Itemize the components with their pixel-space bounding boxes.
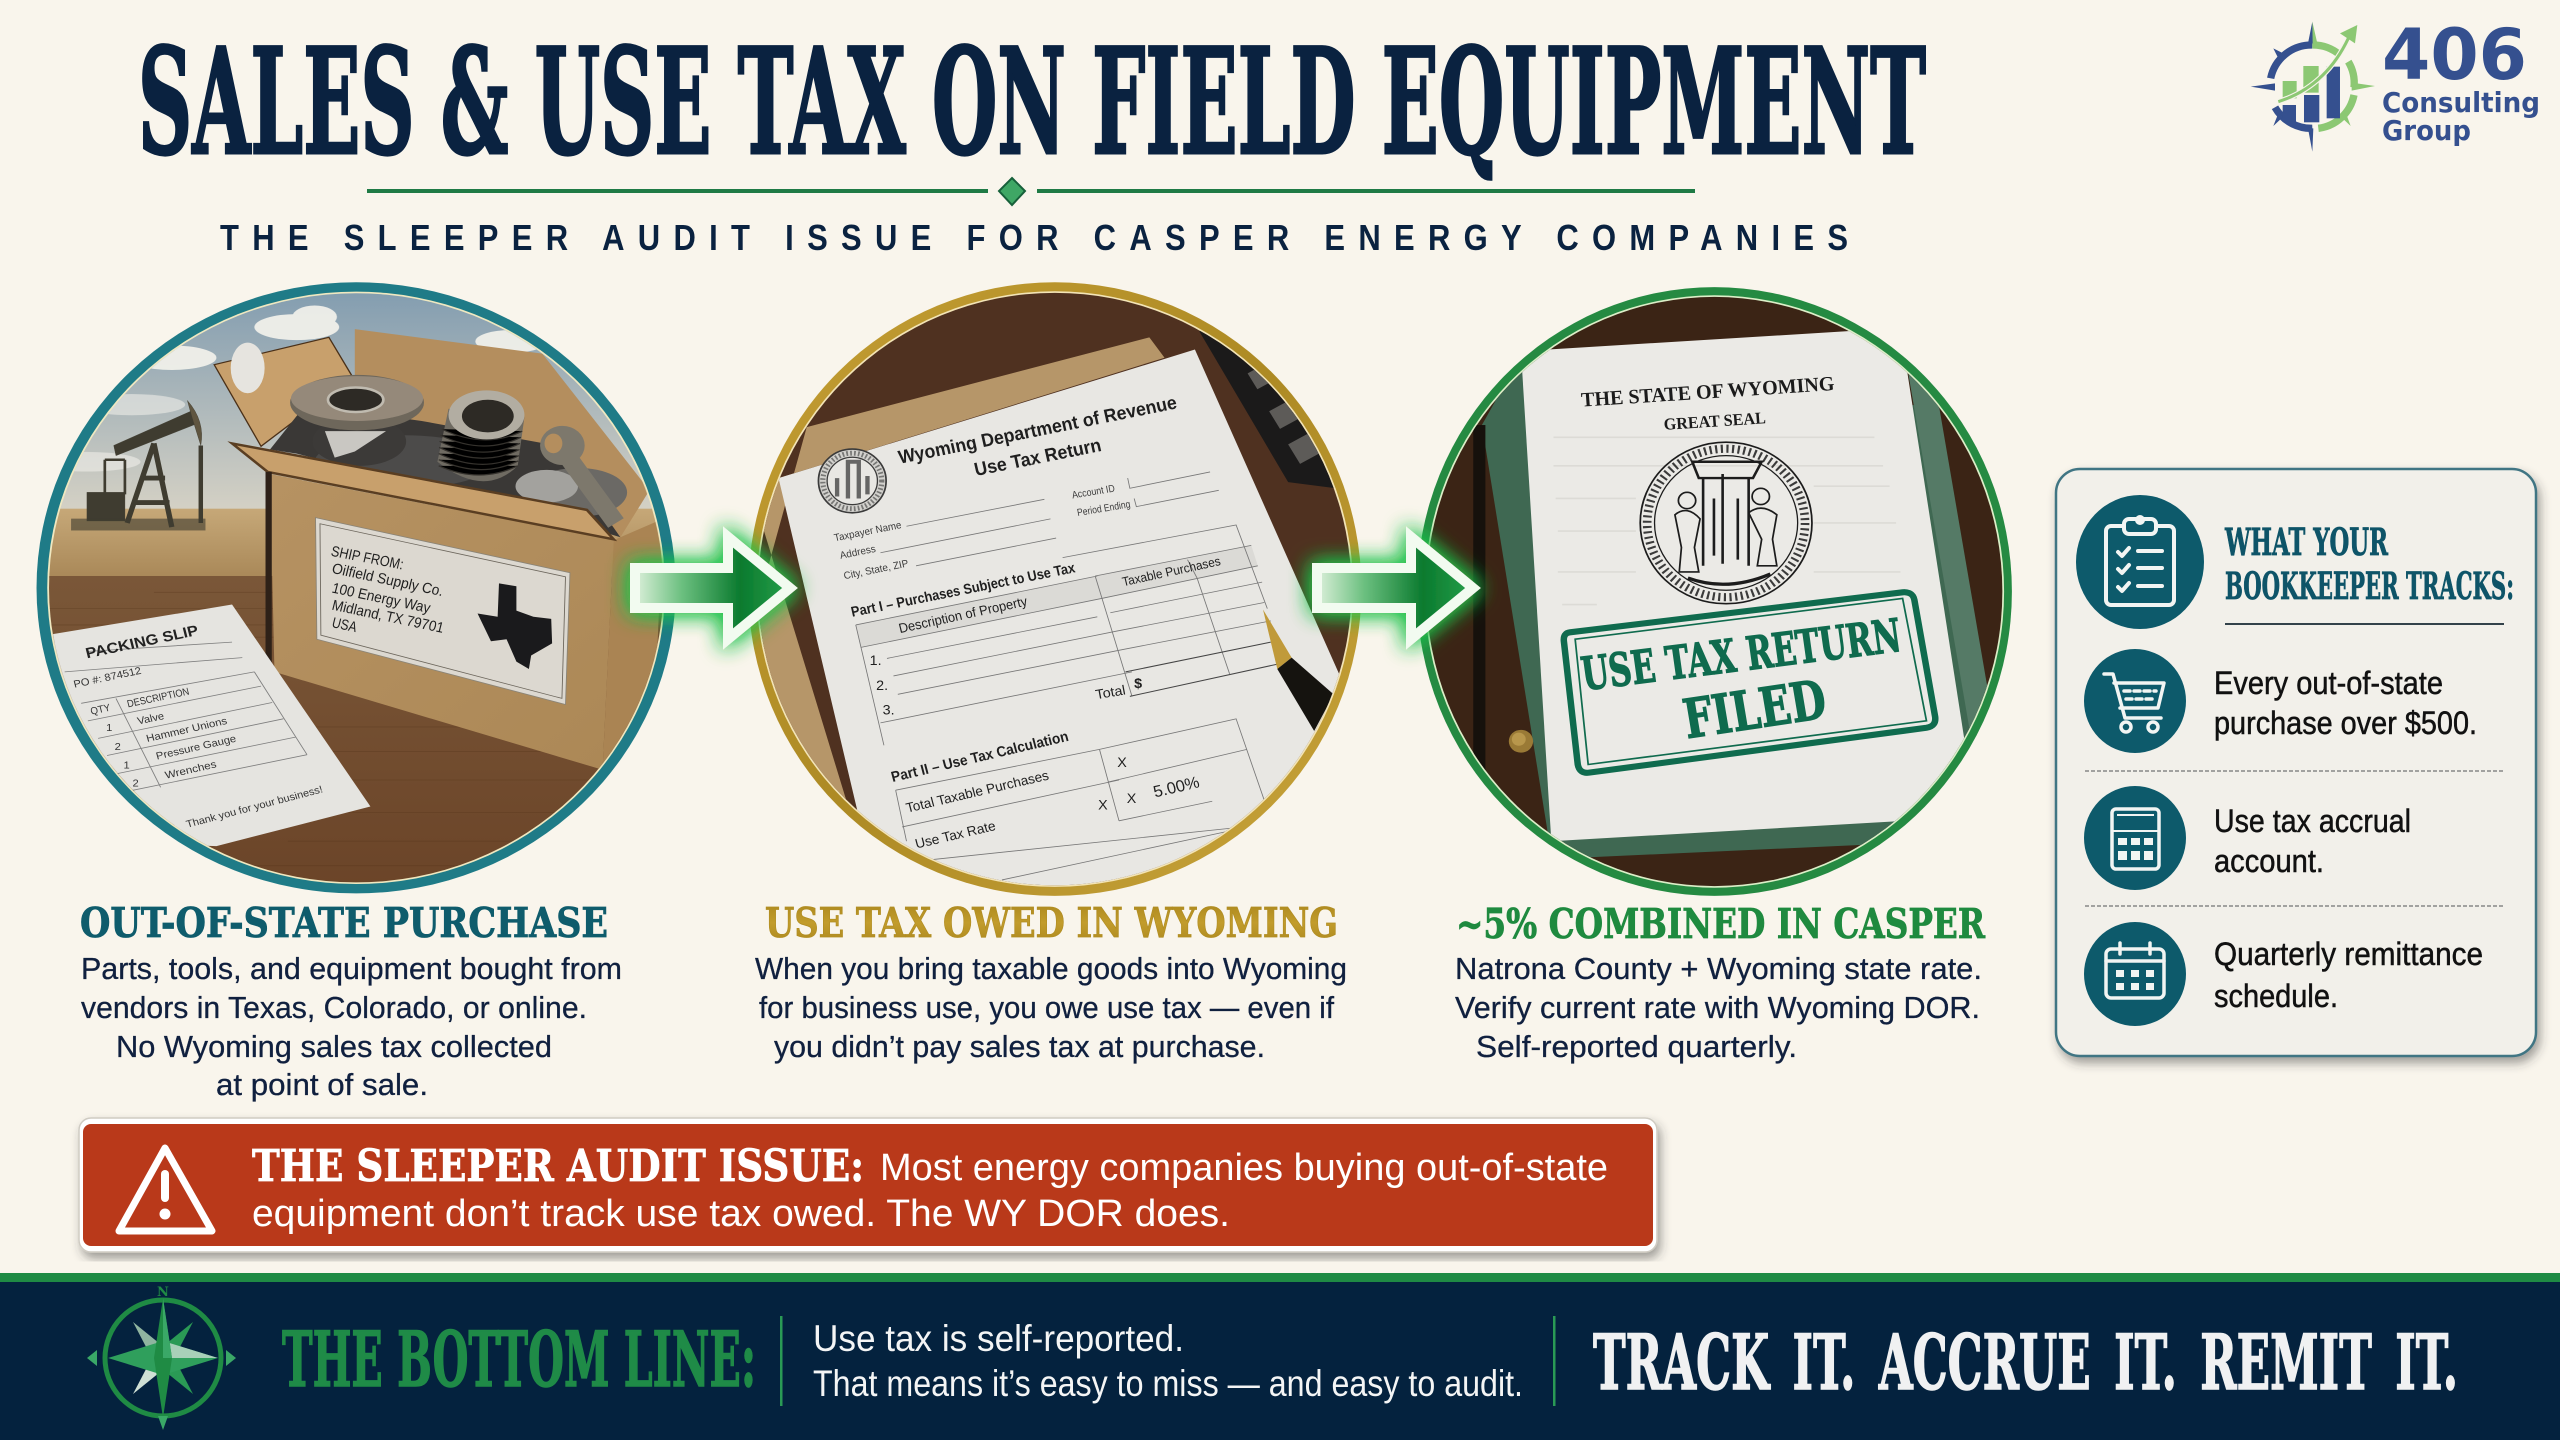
icon: compass rose	[87, 1285, 236, 1430]
heading: out-of-state purchase: OUT-OF-STATE PURCHASE	[80, 899, 608, 947]
use tax return form: 5.00%	[1151, 773, 1201, 801]
use tax return form: Taxpayer Name	[833, 519, 903, 544]
description text	[1455, 951, 1982, 1064]
bottom line text: Use tax is self-reported.	[813, 1318, 1184, 1359]
logo: 406 Consulting Group	[2251, 14, 2540, 152]
item: quarterly remittance schedule: Quarterly remittance	[2214, 936, 2483, 972]
packing slip: QTY	[89, 702, 112, 718]
shipping label: Midland, TX 79701	[330, 597, 446, 637]
callout: the sleeper audit issue	[79, 1118, 1657, 1252]
use tax return form: Taxable Purchases	[1121, 553, 1222, 589]
arrow: purchase to use tax owed	[635, 537, 790, 639]
logo wordmark: 406	[2382, 14, 2527, 96]
use tax return form: X	[1127, 790, 1136, 806]
pumpjack	[71, 401, 205, 530]
description text: Parts, tools, and equipment bought from	[81, 951, 622, 986]
shipping label: USA	[330, 615, 359, 636]
item: use tax accrual account	[2214, 803, 2411, 879]
description text	[755, 951, 1347, 1064]
form seal	[818, 449, 886, 513]
item: quarterly remittance schedule	[2214, 936, 2483, 1014]
packing slip: PACKING SLIP	[84, 623, 200, 662]
use tax return form: Description of Property	[897, 593, 1029, 636]
use tax return form: Wyoming Department of Revenue	[896, 392, 1179, 469]
heading: what your bookkeeper tracks	[2224, 520, 2514, 608]
heading: combined rate: ~5% COMBINED IN CASPER	[1456, 900, 1986, 948]
description text: Self-reported quarterly.	[1476, 1029, 1797, 1064]
use tax return form: Address	[839, 543, 877, 562]
icon: Texas silhouette	[478, 583, 552, 669]
panel: step 1 photo circle, out-of-state box	[36, 282, 675, 894]
logo wordmark	[2382, 14, 2540, 147]
use tax return form: Account ID	[1071, 483, 1116, 501]
packing slip: 2	[132, 778, 139, 789]
text block: combined rate in Casper	[1455, 900, 1986, 1064]
use tax return form: 1.	[870, 652, 882, 668]
description text: No Wyoming sales tax collected	[116, 1029, 552, 1064]
state document: THE STATE OF WYOMING	[1580, 372, 1835, 412]
use tax return form: $	[1134, 676, 1142, 691]
packing slip: 1	[124, 760, 130, 771]
logo wordmark: Group	[2382, 114, 2471, 147]
item: quarterly remittance schedule: schedule.	[2214, 978, 2338, 1014]
description text: at point of sale.	[216, 1067, 428, 1102]
brass rivet	[1509, 730, 1533, 753]
packing slip: Hammer Unions	[145, 715, 229, 745]
use tax return form	[779, 350, 1345, 910]
bottom line text	[813, 1318, 1523, 1404]
use tax return form: Part II – Use Tax Calculation	[889, 728, 1070, 786]
flange and fittings	[290, 375, 616, 523]
arrow: use tax owed to combined rate	[1317, 537, 1473, 639]
item: out-of-state purchase: purchase over $500.	[2214, 705, 2477, 741]
use tax return form: X	[1117, 754, 1127, 770]
shipping label	[316, 518, 570, 705]
packing slip	[47, 605, 370, 846]
icon: clipboard checklist	[2076, 495, 2204, 629]
item: out-of-state purchase: Every out-of-state	[2214, 665, 2443, 701]
packing slip: DESCRIPTION	[126, 686, 190, 710]
state document: GREAT SEAL	[1663, 409, 1766, 434]
item: out-of-state purchase	[2214, 665, 2477, 741]
calculator	[1199, 331, 1334, 488]
stamp: use tax return filed	[1564, 592, 1935, 773]
packing slip: Wrenches	[164, 759, 218, 782]
description text: Verify current rate with Wyoming DOR.	[1455, 990, 1980, 1025]
description text: vendors in Texas, Colorado, or online.	[81, 990, 587, 1025]
item: use tax accrual account: account.	[2214, 843, 2324, 879]
shipping label: 100 Energy Way	[330, 580, 432, 617]
use tax return form: Use Tax Return	[972, 435, 1103, 481]
packing slip: Thank you for your business!	[185, 784, 324, 830]
state document	[1521, 328, 1976, 841]
text block: out-of-state purchase	[80, 899, 622, 1102]
use tax return form: Total	[1094, 682, 1127, 702]
stamp: use tax return filed: FILED	[1679, 669, 1831, 752]
icon: calculator	[2084, 786, 2186, 890]
item: use tax accrual account: Use tax accrual	[2214, 803, 2411, 839]
cardboard box	[355, 329, 649, 537]
packing slip: 2	[115, 741, 121, 753]
packing slip: 1	[106, 722, 112, 734]
use tax return form: Part I – Purchases Subject to Use Tax	[850, 561, 1077, 621]
great seal of Wyoming	[1640, 442, 1812, 604]
heading: what your bookkeeper tracks: WHAT YOUR	[2224, 520, 2388, 564]
text block: use tax owed in Wyoming	[755, 899, 1347, 1064]
panel: step 2 photo circle, Wyoming use tax return	[750, 282, 1360, 896]
footer band: the bottom line	[0, 1273, 2560, 1440]
callout text: THE SLEEPER AUDIT ISSUE:	[252, 1141, 864, 1192]
subtitle: THE SLEEPER AUDIT ISSUE FOR CASPER ENERGY COMPANIES	[220, 219, 1848, 259]
shipping label: Oilfield Supply Co.	[330, 561, 445, 600]
packing slip: Valve	[136, 711, 165, 727]
panel: what your bookkeeper tracks	[2056, 469, 2536, 1056]
logo wordmark: Consulting	[2382, 86, 2540, 119]
heading: use tax owed: USE TAX OWED IN WYOMING	[765, 899, 1338, 947]
description text: Natrona County + Wyoming state rate.	[1455, 951, 1982, 986]
stamp: use tax return filed: USE TAX RETURN	[1578, 609, 1905, 702]
use tax return form: 2.	[876, 678, 888, 693]
shipping label: SHIP FROM:	[329, 543, 405, 573]
title divider with diamond	[367, 178, 1695, 205]
use tax return form: X	[1098, 797, 1108, 812]
bottom line heading: THE BOTTOM LINE:	[282, 1315, 756, 1404]
callout text: equipment don’t track use tax owed. The WY DOR does.	[252, 1193, 1230, 1235]
pen	[1263, 609, 1334, 731]
icon: warning triangle	[119, 1148, 212, 1231]
description text: When you bring taxable goods into Wyoming	[755, 951, 1347, 986]
description text: you didn’t pay sales tax at purchase.	[774, 1029, 1265, 1064]
icon: shopping cart	[2084, 649, 2186, 753]
logo mark: compass and growth chart	[2251, 22, 2375, 152]
use tax return form: Use Tax Rate	[913, 818, 997, 851]
packing slip: PO #: 874512	[72, 665, 143, 691]
icon: calendar	[2084, 922, 2186, 1026]
bottom line text: That means it’s easy to miss — and easy to audit.	[813, 1363, 1523, 1404]
use tax return form: Total Taxable Purchases	[904, 767, 1050, 815]
panel: step 3 photo circle, filed return	[1420, 287, 2012, 896]
use tax return form: 3.	[883, 702, 895, 718]
callout text	[252, 1141, 1608, 1235]
use tax return form: Period Ending	[1076, 499, 1131, 519]
packing slip: Pressure Gauge	[155, 733, 238, 762]
callout text: Most energy companies buying out-of-state	[880, 1147, 1608, 1189]
description text: for business use, you owe use tax — even if	[759, 990, 1334, 1025]
use tax return form: City, State, ZIP	[843, 558, 910, 582]
description text	[81, 951, 622, 1102]
icon: compass rose: N	[157, 1285, 169, 1300]
